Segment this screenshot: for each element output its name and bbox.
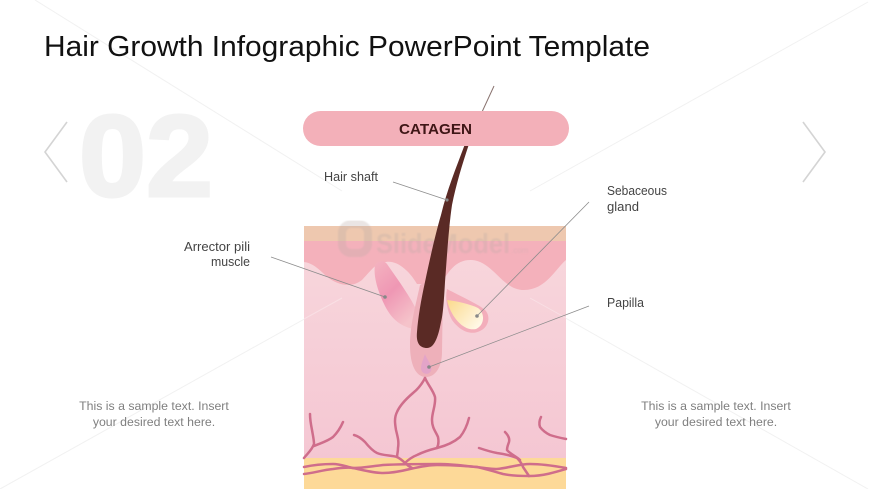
callout: arrector pili muscle: muscle — [211, 255, 250, 269]
epidermis band — [304, 241, 566, 290]
sebaceous gland — [446, 289, 488, 333]
hair tip line — [482, 86, 494, 112]
callout: papilla — [427, 296, 644, 369]
right chevron arrow — [803, 122, 825, 182]
fat layer — [304, 458, 566, 489]
blood vessels — [304, 378, 566, 476]
title: Hair Growth Infographic PowerPoint Template — [44, 31, 650, 63]
watermark: .com — [511, 246, 529, 255]
watermark: SlideModel — [376, 228, 510, 259]
left sample text: your desired text here. — [93, 415, 215, 429]
callout: hair shaft — [324, 170, 449, 202]
papilla — [421, 354, 431, 374]
step number: 02 — [79, 91, 213, 221]
callout: hair shaft: Hair shaft — [324, 170, 379, 184]
hair follicle — [410, 282, 443, 377]
right sample text: your desired text here. — [655, 415, 777, 429]
left sample text: This is a sample text. Insert — [79, 399, 229, 413]
callout: sebaceous gland — [475, 184, 667, 318]
callout: sebaceous gland: Sebaceous — [607, 184, 667, 198]
faint background lines over skin — [304, 298, 566, 319]
callout: arrector pili muscle — [184, 240, 387, 299]
dermis — [304, 226, 566, 489]
callout: papilla: Papilla — [607, 296, 644, 310]
right sample text — [641, 399, 791, 429]
skin cross-section diagram — [304, 144, 566, 489]
right sample text: This is a sample text. Insert — [641, 399, 791, 413]
stage pill — [303, 111, 569, 146]
left sample text — [79, 399, 229, 429]
callout: arrector pili muscle: Arrector pili — [184, 240, 250, 254]
arrector pili muscle — [375, 261, 418, 329]
left chevron arrow — [45, 122, 67, 182]
stage pill: CATAGEN — [399, 121, 472, 138]
hair shaft — [417, 144, 469, 348]
callout: sebaceous gland: gland — [607, 200, 639, 214]
top tan layer — [304, 226, 566, 241]
